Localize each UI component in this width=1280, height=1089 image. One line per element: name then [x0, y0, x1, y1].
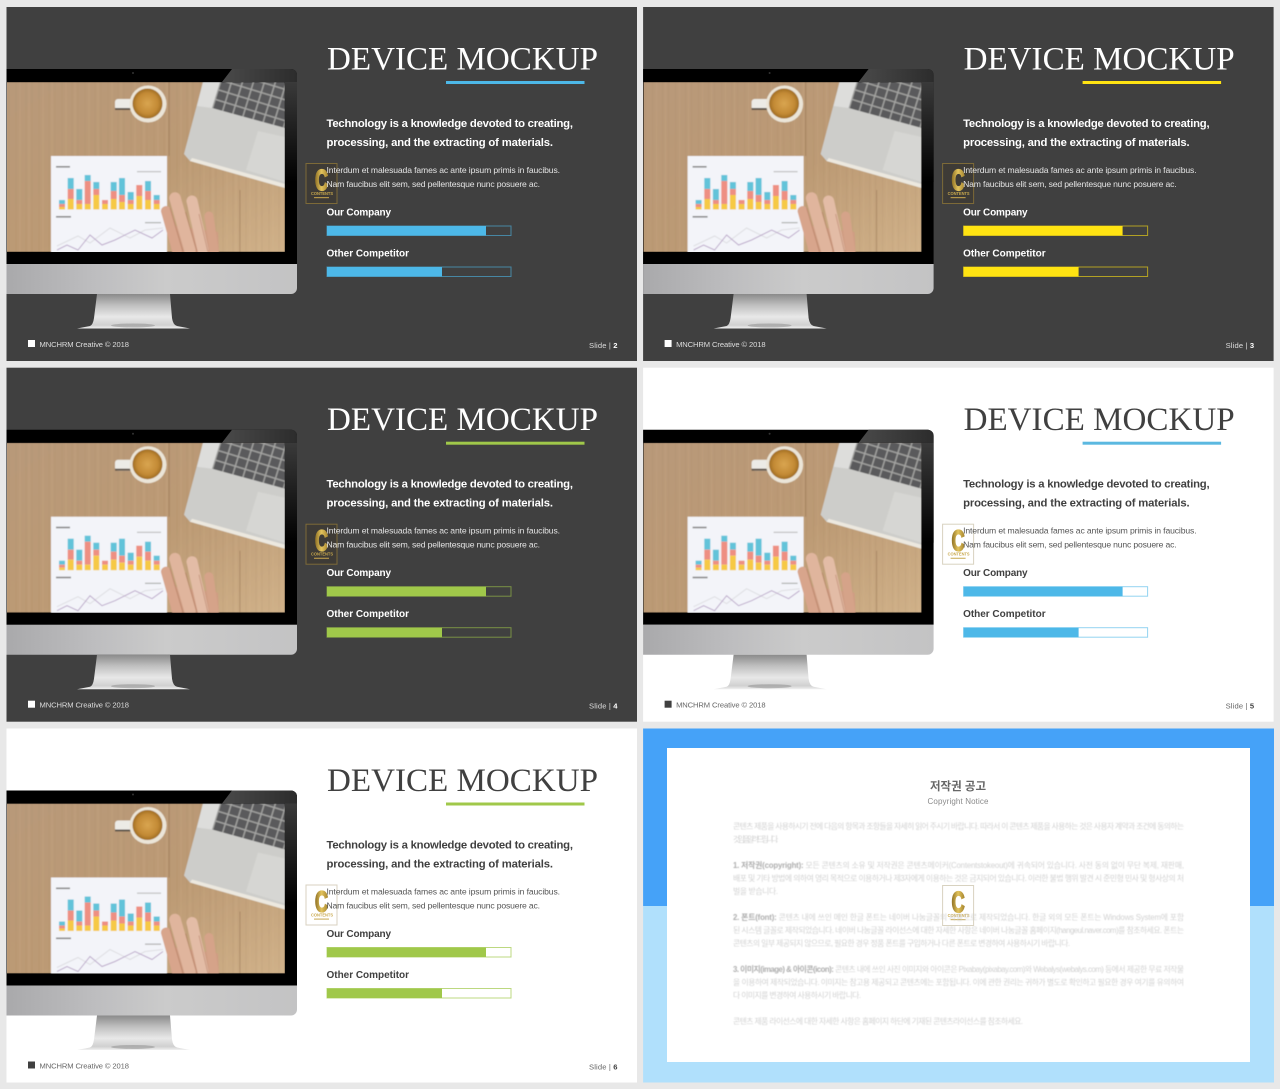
notice body text: 을 이용하여 제작되었습니다. 이미지는 참고용 제공되고 콘텐츠에는 포함됩니다. 이에 관한 권리는 귀하가 별도로 확인하고 필요한 경우 여기를 유의하여	[733, 977, 1184, 987]
notice subheading: Copyright Notice	[928, 797, 989, 806]
lead text: processing, and the extracting of materials.	[326, 137, 553, 149]
lead text: Technology is a knowledge devoted to creating,	[326, 118, 573, 130]
lead text: Technology is a knowledge devoted to creating,	[326, 479, 573, 491]
title underline	[446, 802, 584, 806]
device mockup monitor	[643, 430, 934, 689]
bar: our company: Our Company	[326, 568, 391, 579]
device mockup monitor	[6, 430, 297, 689]
lead text: processing, and the extracting of materials.	[326, 498, 553, 510]
title: DEVICE MOCKUP	[964, 402, 1235, 438]
lead text: Technology is a knowledge devoted to creating,	[326, 840, 573, 852]
panel: slide 2, dark with blue accent	[6, 7, 637, 361]
footer brand: MNCHRM Creative © 2018	[40, 701, 129, 710]
notice body text: 2. 폰트(font): 콘텐츠 내에 쓰인 메인 한글 폰트는 네이버 나눔글꼴의 사용으로 제작되었습니다. 한글 외의 모든 폰트는 Windows System에 포함	[733, 912, 1184, 922]
slide number: Slide | 5	[1226, 702, 1255, 711]
notice body text	[733, 821, 1184, 1026]
bar: other competitor: Other Competitor	[963, 609, 1046, 620]
body text: Nam faucibus elit sem, sed pellentesque nunc posuere ac.	[326, 900, 540, 910]
bar: other competitor	[326, 248, 511, 276]
slide number: Slide | 4	[589, 702, 618, 711]
title: DEVICE MOCKUP	[327, 402, 598, 438]
body text: Interdum et malesuada fames ac ante ipsum primis in faucibus.	[963, 526, 1197, 536]
panel: slide 4, dark with green accent	[6, 368, 637, 722]
notice body text: 벌을 받습니다.	[733, 886, 778, 896]
slide number: Slide | 6	[589, 1062, 618, 1072]
notice body text: 콘텐츠 제품 라이선스에 대한 자세한 사항은 홈페이지 하단에 기재된 콘텐츠라이선스를 참조하세요.	[733, 1016, 1023, 1026]
bar: other competitor	[326, 609, 511, 637]
bar: other competitor: Other Competitor	[326, 970, 409, 981]
body text: Interdum et malesuada fames ac ante ipsum primis in faucibus.	[963, 165, 1197, 175]
bar: our company: Our Company	[963, 208, 1028, 218]
notice body text: 배포 및 기타 방법에 의하여 영리 목적으로 이용하거나 제3자에게 이용하는 것은 금지되어 있습니다. 이러한 불법 행위 발견 시 준민형 민사 및 형사상의 처	[733, 873, 1184, 883]
panel: slide 6, white with green accent	[6, 728, 637, 1082]
notice body text: 된 시스템 글꼴로 제작되었습니다. 네이버 나눔글꼴 라이선스에 대한 자세한 사항은 네이버 나눔글꼴 홈페이지(hangeul.naver.com)를 참조하세요. 폰트는	[733, 925, 1184, 935]
title underline	[446, 81, 584, 84]
watermark logo	[943, 886, 974, 926]
panel: copyright notice slide	[643, 728, 1274, 1082]
bar: our company	[326, 929, 511, 957]
lead text: Technology is a knowledge devoted to creating,	[963, 479, 1210, 491]
notice card	[667, 748, 1250, 1062]
slide number: Slide | 2	[589, 341, 618, 350]
body text: Interdum et malesuada fames ac ante ipsum primis in faucibus.	[326, 526, 560, 536]
lead text	[326, 479, 573, 510]
title: DEVICE MOCKUP	[327, 763, 598, 799]
lead text	[963, 479, 1210, 510]
device mockup monitor	[6, 69, 297, 328]
bar: our company	[326, 208, 511, 236]
notice body text: 콘텐츠 제품을 사용하시기 전에 다음의 항목과 조항들을 자세히 읽어 주시기 바랍니다. 따라서 이 콘텐츠 제품을 사용하는 것은 사용자 계약과 조건에 동의하는	[733, 821, 1184, 831]
bar: other competitor	[963, 609, 1148, 637]
body text: Nam faucibus elit sem, sed pellentesque nunc posuere ac.	[326, 179, 540, 189]
notice body text: 3. 이미지(image) & 아이콘(icon): 콘텐츠 내에 쓰인 사진 이미지와 아이콘은 Pixabay(pixabay.com)와 Webalys(webalys.com) 등에서 제공한 무료 저작물	[733, 964, 1184, 974]
body text	[963, 165, 1197, 189]
slide number: Slide | 3	[1226, 341, 1254, 350]
watermark logo	[306, 885, 337, 925]
footer brand: MNCHRM Creative © 2018	[40, 1062, 129, 1070]
device mockup monitor	[6, 790, 297, 1050]
lead text	[326, 840, 573, 870]
lead text: processing, and the extracting of materials.	[963, 498, 1190, 510]
notice body text: 1. 저작권(copyright): 모든 콘텐츠의 소유 및 저작권은 콘텐츠메이커(Contentstokeout)에 귀속되어 있습니다. 사전 동의 없이 무단 복제, 재판매,	[733, 860, 1184, 870]
bar: our company	[963, 208, 1148, 236]
bar: other competitor	[326, 970, 511, 998]
notice body text: 것임을 알려드립니다.	[733, 834, 778, 844]
watermark logo	[943, 164, 974, 204]
lead text: processing, and the extracting of materials.	[326, 858, 553, 870]
lead text: Technology is a knowledge devoted to creating,	[963, 118, 1210, 130]
footer brand: MNCHRM Creative © 2018	[676, 340, 766, 349]
lead text	[326, 118, 573, 149]
body text	[963, 526, 1197, 550]
watermark logo	[943, 524, 974, 564]
body text	[326, 165, 560, 189]
body text: Interdum et malesuada fames ac ante ipsum primis in faucibus.	[326, 886, 560, 896]
device mockup monitor	[643, 69, 934, 328]
panel: slide 3, dark with yellow accent	[643, 7, 1274, 361]
body text: Interdum et malesuada fames ac ante ipsum primis in faucibus.	[326, 165, 560, 175]
bar: our company	[326, 568, 511, 596]
body text	[326, 886, 560, 910]
bar: other competitor: Other Competitor	[963, 248, 1046, 260]
body text: Nam faucibus elit sem, sed pellentesque nunc posuere ac.	[326, 540, 540, 550]
notice body text: 콘텐츠의 일부 제공되지 않으므로, 필요한 경우 정품 폰트를 구입하거나 다른 폰트로 변경하여 사용하시기 바랍니다.	[733, 938, 1070, 948]
notice body text: 다 이미지를 변경하여 사용하시기 바랍니다.	[733, 990, 861, 1000]
bar: our company: Our Company	[326, 208, 391, 218]
panel: slide 5, white with blue accent	[643, 368, 1274, 722]
bar: other competitor: Other Competitor	[326, 609, 409, 620]
body text: Nam faucibus elit sem, sed pellentesque nunc posuere ac.	[963, 540, 1177, 550]
bar: other competitor	[963, 248, 1148, 276]
lead text: processing, and the extracting of materials.	[963, 137, 1190, 149]
title: DEVICE MOCKUP	[327, 42, 598, 78]
bar: our company: Our Company	[326, 929, 391, 940]
bar: our company: Our Company	[963, 568, 1028, 579]
footer brand: MNCHRM Creative © 2018	[676, 701, 766, 710]
title underline	[1083, 442, 1221, 445]
watermark logo	[306, 164, 337, 204]
lead text	[963, 118, 1210, 149]
bar: other competitor: Other Competitor	[326, 248, 409, 260]
watermark logo	[306, 524, 337, 564]
title underline	[446, 442, 584, 445]
bar: our company	[963, 568, 1148, 596]
body text	[326, 526, 560, 550]
notice heading: 저작권 공고	[930, 779, 986, 793]
body text: Nam faucibus elit sem, sed pellentesque nunc posuere ac.	[963, 179, 1177, 189]
title: DEVICE MOCKUP	[964, 42, 1235, 78]
footer brand: MNCHRM Creative © 2018	[40, 340, 129, 349]
title underline	[1083, 81, 1221, 84]
